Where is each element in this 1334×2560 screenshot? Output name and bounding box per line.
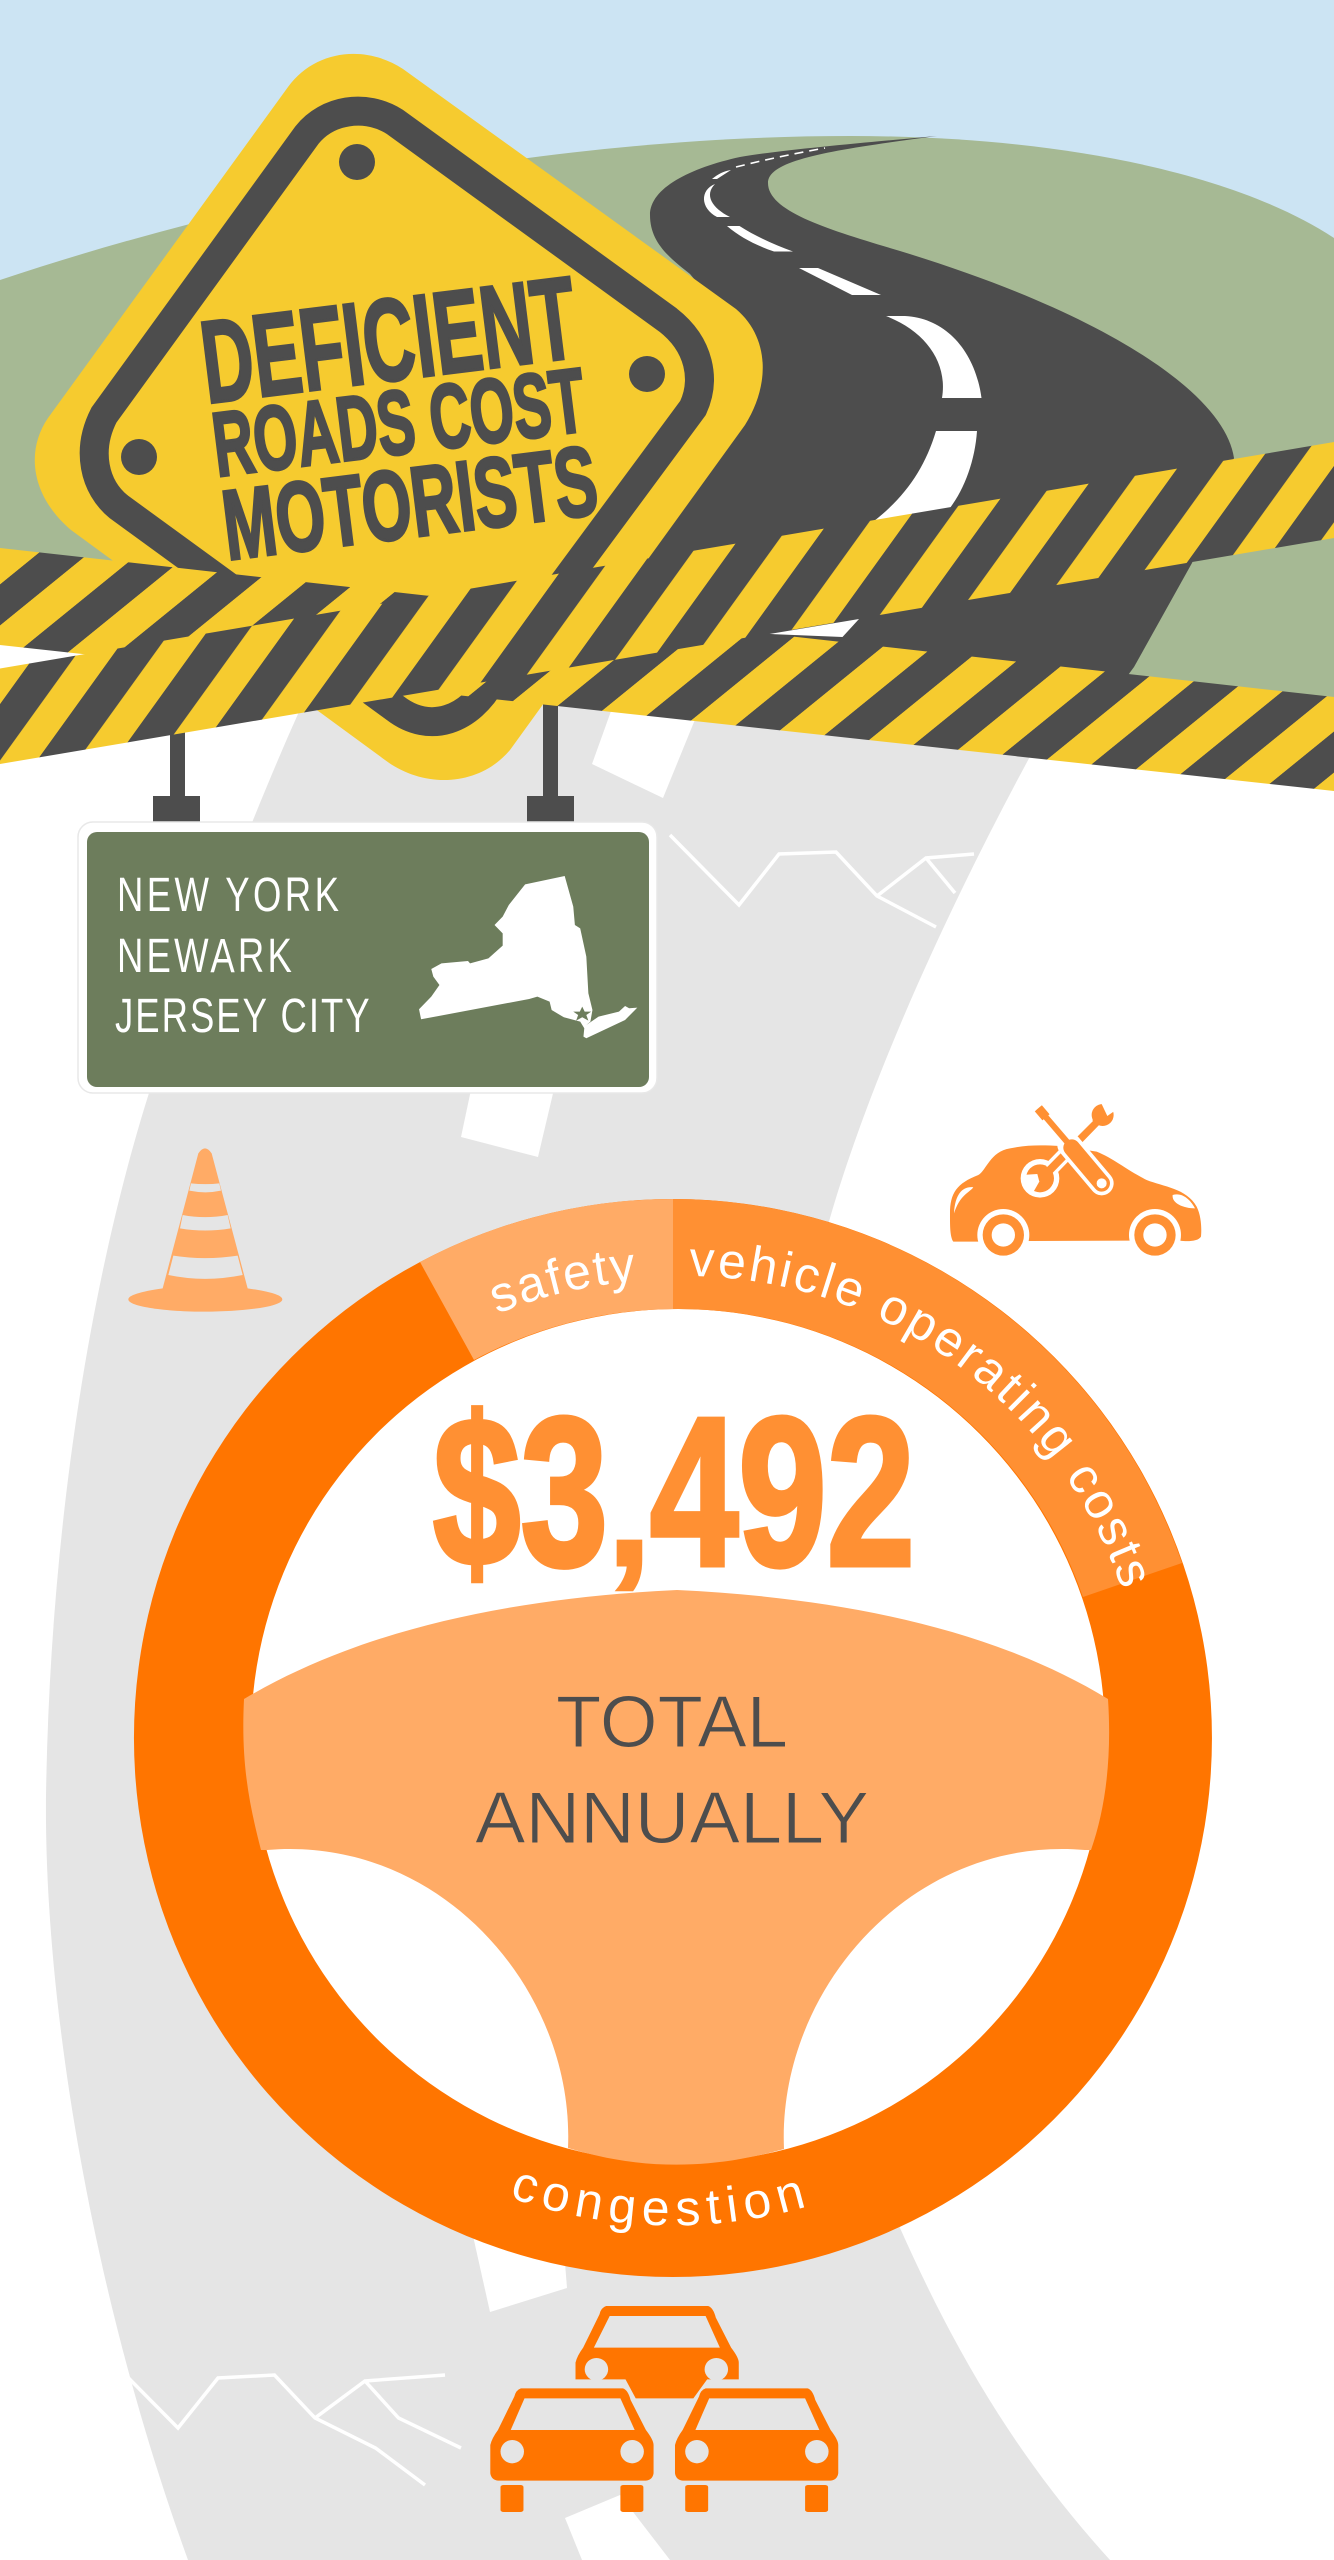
caution tape upper [0,442,1334,764]
wrench [1021,1100,1115,1198]
caution tape lower [0,548,1334,791]
steering wheel [134,1199,1212,2277]
road centre dashes [704,148,982,637]
sign bolts [121,144,665,475]
icon: New York state [419,876,637,1038]
screwdriver [1038,1108,1107,1188]
green hills [0,136,1334,745]
icon: three cars in traffic [490,2306,838,2512]
sign dark border [94,111,699,722]
wheel white interior [248,1306,1108,2166]
grey foreground highway [46,640,1110,2560]
title: DEFICIENT [194,252,583,428]
front left car [490,2388,654,2512]
metro names: JERSEY CITY [115,989,370,1043]
metro names: NEWARK [117,929,292,983]
ring: vehicle operating costs segment [673,1199,1182,1597]
metro names: NEW YORK [117,868,339,922]
sign posts [153,695,574,822]
total amount [433,1373,915,1610]
icon: traffic cone [128,1148,282,1312]
metro names [115,868,370,1043]
label: congestion: congestion [514,2175,804,2233]
ring: safety segment [420,1199,673,1360]
total amount: $3 [433,1373,608,1610]
ring: congestion segment [134,1199,1212,2277]
lower road cracks [126,2375,461,2485]
back car [576,2306,739,2398]
title [194,251,603,581]
green highway location sign [78,822,657,1093]
highway lane dashes [461,700,703,2560]
total annually label [475,1682,869,1859]
total annually label: TOTAL [556,1682,788,1763]
sky background [0,0,1334,320]
wheel spokes [243,1590,1109,2165]
label: safety: safety [492,1252,634,1312]
icon: car with wrench and screwdriver [950,1100,1201,1261]
title: MOTORISTS [216,424,603,581]
upper road cracks [670,835,974,927]
total annually label: ANNUALLY [475,1778,869,1859]
winding asphalt road on hill [620,136,1234,690]
yellow warning sign [35,54,763,780]
front right car [675,2388,838,2512]
label: vehicle operating costs: vehicle operating costs [690,1244,1144,1586]
total amount: , [607,1420,651,1599]
total amount: 492 [650,1373,915,1610]
title: ROADS COST [207,350,591,496]
